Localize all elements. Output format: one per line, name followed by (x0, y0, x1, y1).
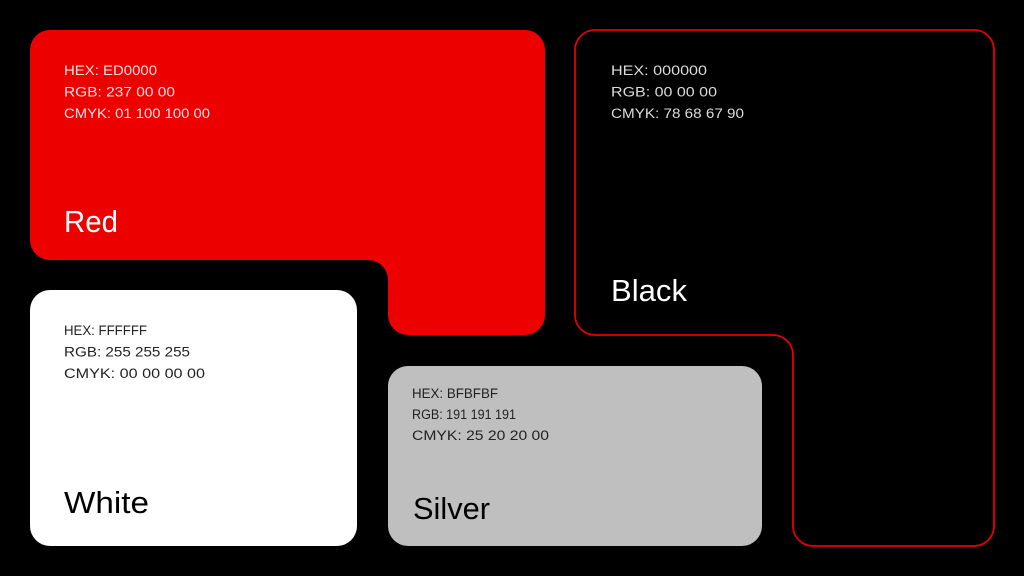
white colour values: CMYK: 00 00 00 00 (64, 366, 205, 381)
panel: silver (388, 366, 762, 546)
white colour values: RGB: 255 255 255 (64, 344, 190, 360)
silver label: Silver (413, 491, 490, 526)
red label: Red (64, 204, 118, 239)
black colour values: CMYK: 78 68 67 90 (611, 106, 744, 121)
red notched shape (30, 30, 545, 335)
black label: Black (611, 273, 687, 308)
silver colour values (412, 386, 549, 443)
black colour values (611, 63, 744, 121)
silver colour values: HEX: BFBFBF (412, 386, 498, 401)
red colour values (64, 63, 210, 121)
white colour values (64, 323, 205, 381)
red colour values: HEX: ED0000 (64, 63, 157, 78)
silver card (388, 366, 762, 546)
black colour values: HEX: 000000 (611, 63, 707, 78)
red colour values: CMYK: 01 100 100 00 (64, 106, 210, 121)
white colour values: HEX: FFFFFF (64, 323, 147, 338)
black outlined notched shape (575, 30, 994, 546)
white label: White (64, 485, 149, 520)
panel: red (30, 30, 545, 335)
panel: white (30, 290, 357, 546)
white card (30, 290, 357, 546)
silver colour values: CMYK: 25 20 20 00 (412, 428, 549, 443)
silver colour values: RGB: 191 191 191 (412, 407, 516, 422)
red colour values: RGB: 237 00 00 (64, 84, 175, 100)
black colour values: RGB: 00 00 00 (611, 84, 717, 100)
panel: black (575, 30, 994, 546)
